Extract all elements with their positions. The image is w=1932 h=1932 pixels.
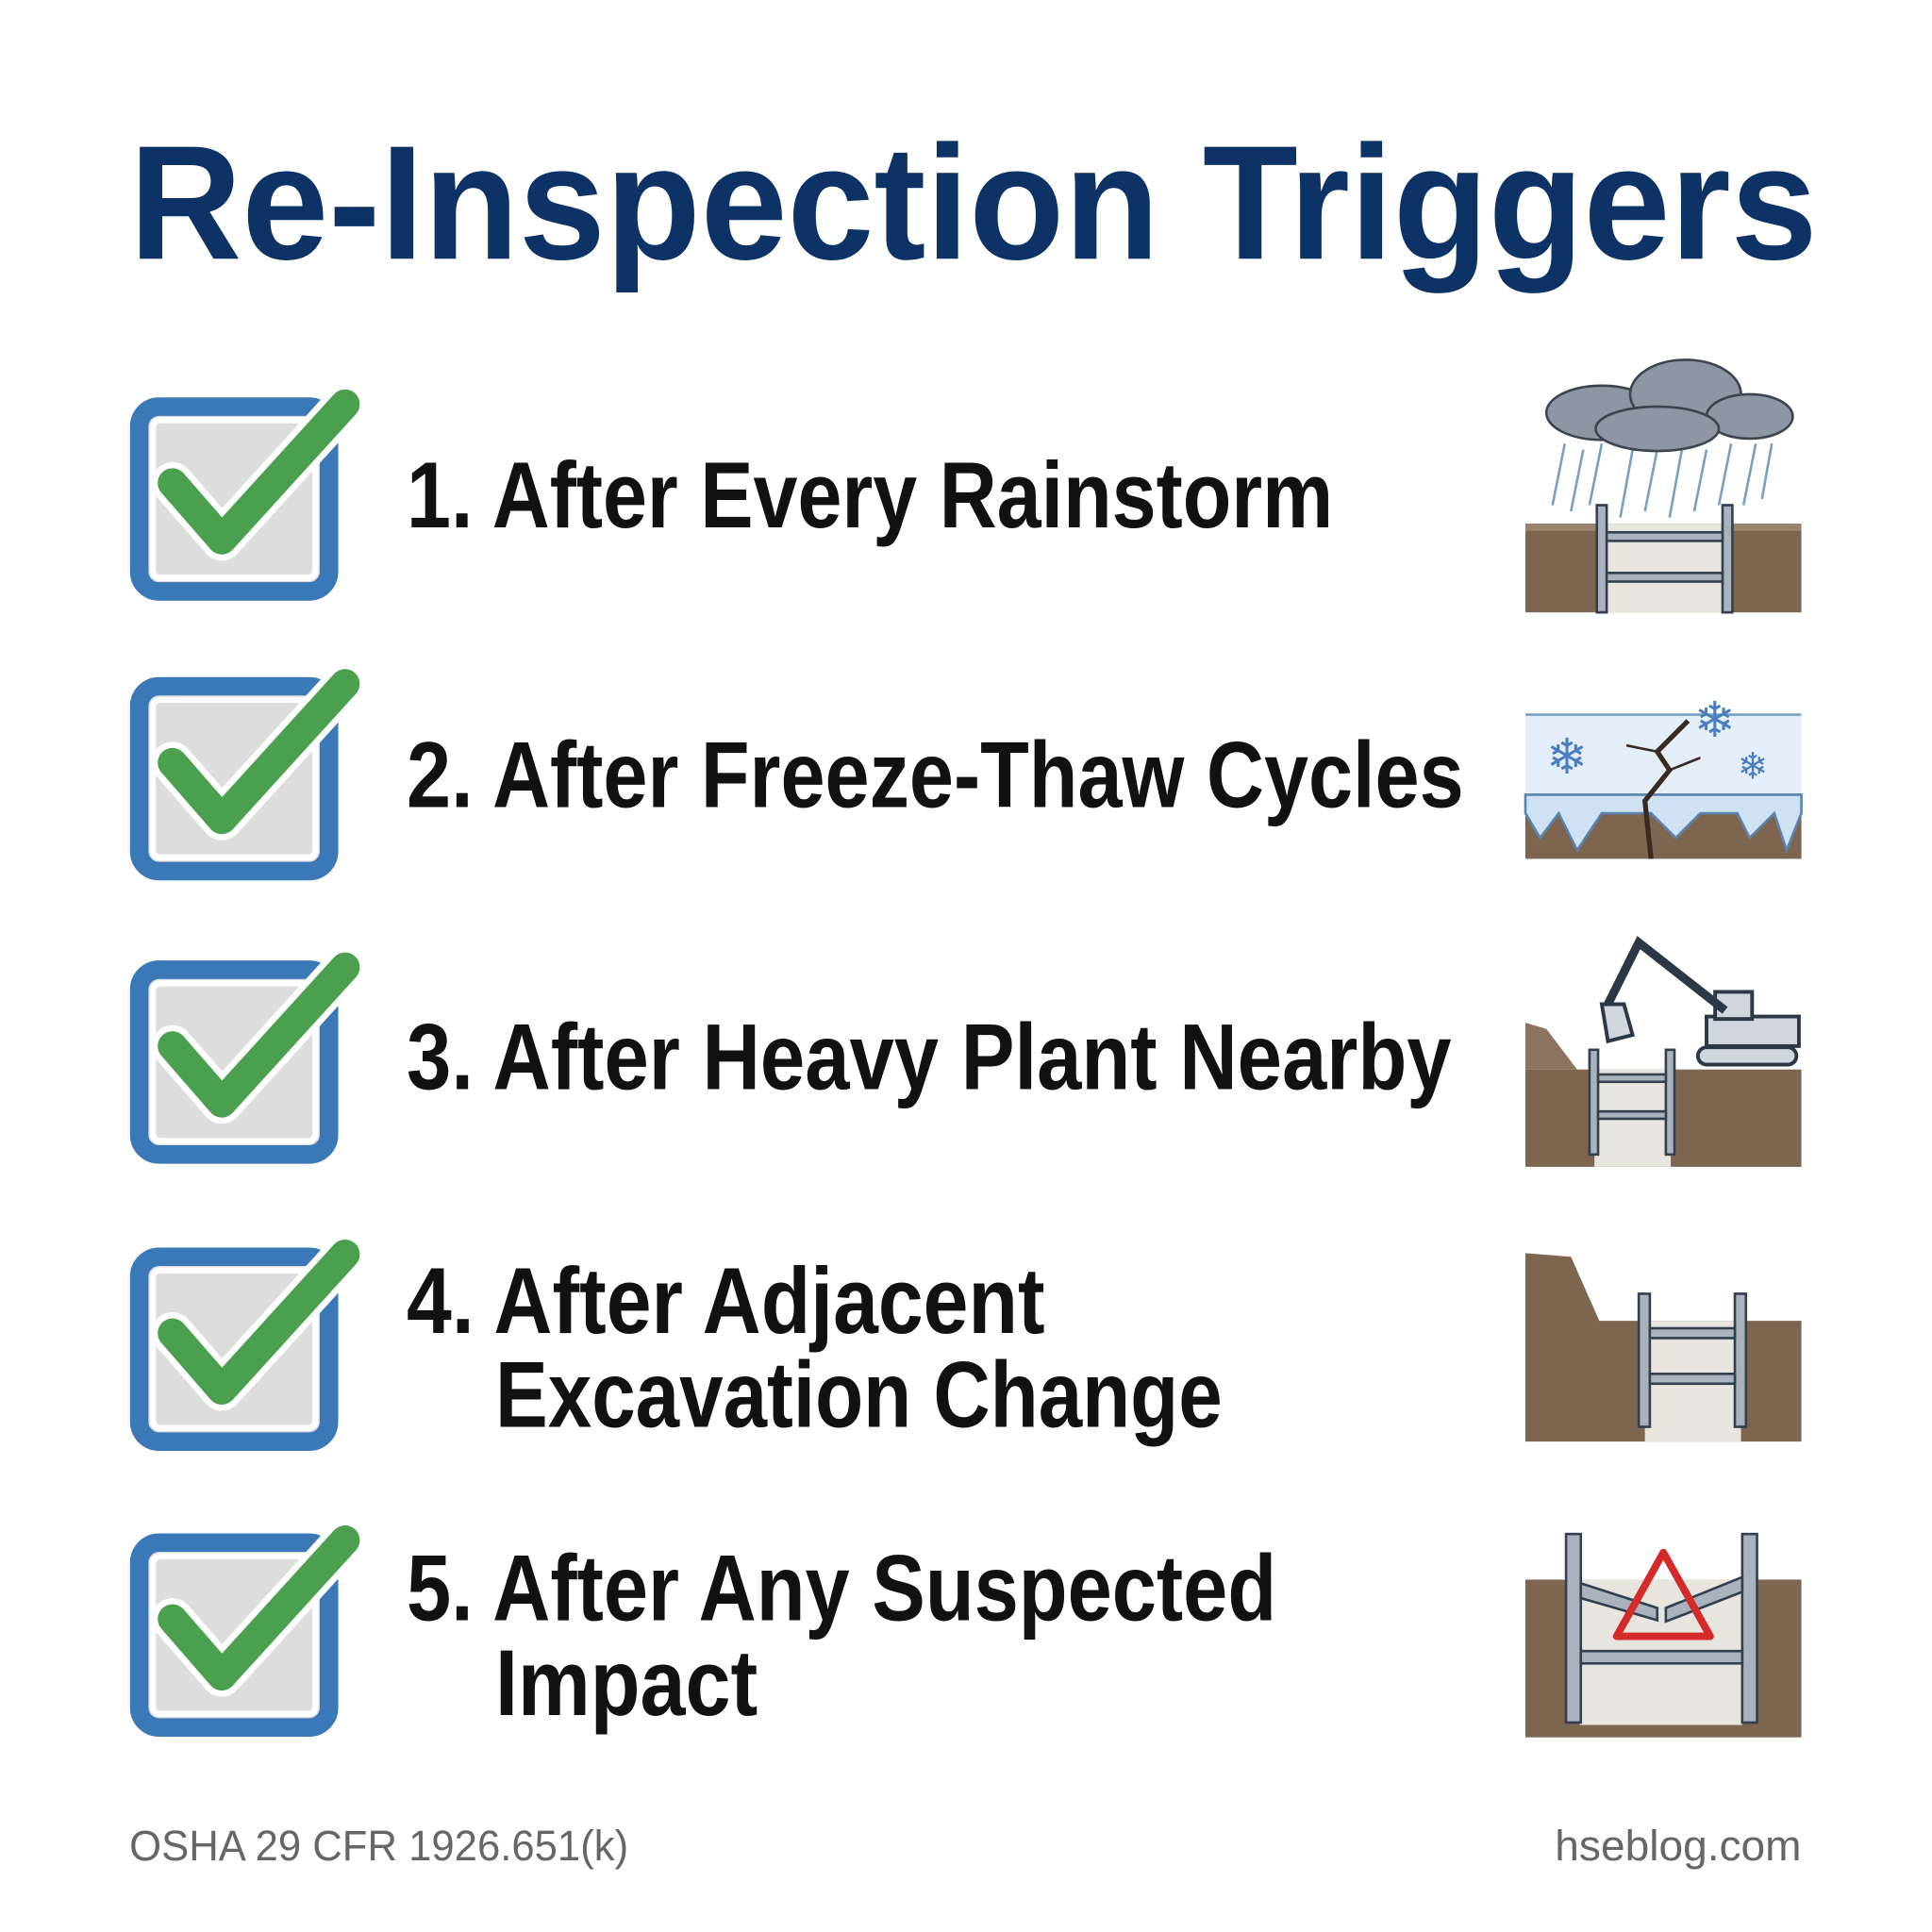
icon: freeze-thaw: ❄	[1694, 692, 1736, 749]
item 4 text	[407, 1249, 1223, 1447]
item 5 text: 5. After Any Suspected	[407, 1537, 1276, 1641]
icon: heavy plant	[1525, 942, 1802, 1167]
icon: suspected impact	[1525, 1534, 1802, 1738]
item 4 text: 4. After Adjacent	[407, 1249, 1045, 1354]
item 4 text: Excavation Change	[495, 1342, 1223, 1447]
icon: adjacent excavation	[1525, 1253, 1802, 1441]
checkbox 5	[140, 1541, 345, 1727]
item 5 text	[407, 1537, 1276, 1736]
icon: freeze-thaw: ❄	[1738, 745, 1768, 788]
icon: freeze-thaw	[1525, 692, 1802, 858]
footer site: hseblog.com	[1555, 1822, 1802, 1870]
item 2 text: 2. After Freeze-Thaw Cycles	[407, 724, 1464, 828]
item 3 text: 3. After Heavy Plant Nearby	[407, 1006, 1452, 1110]
item 5 text: Impact	[495, 1631, 758, 1736]
checkbox 2	[140, 684, 345, 871]
checkbox 1	[140, 404, 345, 591]
item 1 text: 1. After Every Rainstorm	[407, 443, 1333, 548]
icon: freeze-thaw: ❄	[1546, 729, 1588, 786]
checkbox 4	[140, 1255, 345, 1441]
icon: rainstorm trench	[1525, 359, 1802, 612]
title: Re-Inspection Triggers	[129, 111, 1818, 293]
checkbox 3	[140, 967, 345, 1155]
footer source: OSHA 29 CFR 1926.651(k)	[129, 1822, 628, 1870]
